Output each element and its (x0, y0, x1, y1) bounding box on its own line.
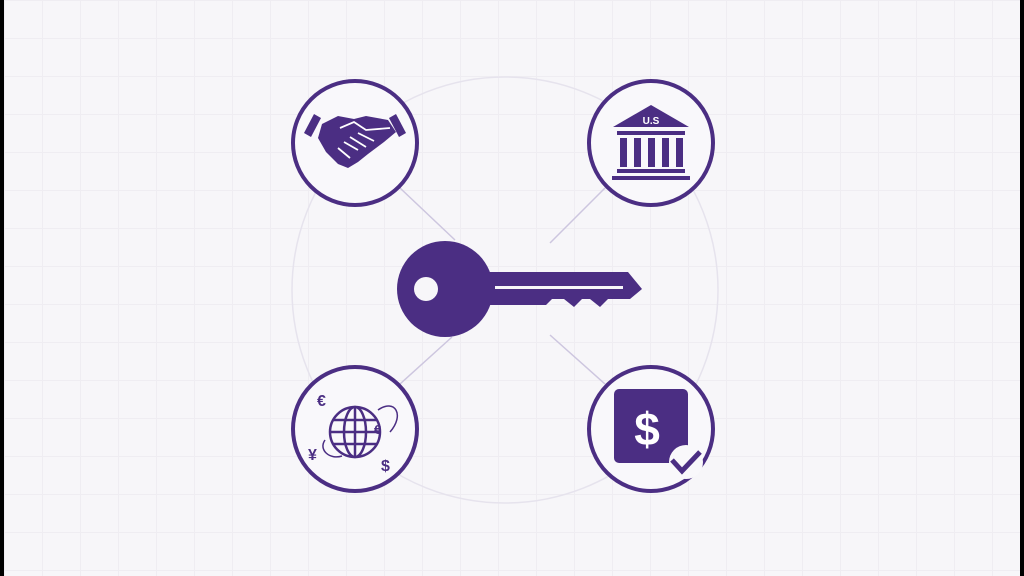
icon: globe currencies: € (317, 393, 326, 410)
icon: US bank: U.S (643, 116, 660, 127)
icon: approved dollar (589, 367, 713, 491)
icon: key (397, 241, 642, 337)
icon: handshake (293, 81, 417, 205)
icon: US bank (589, 81, 713, 205)
icon: globe currencies: $ (381, 458, 390, 475)
connector lines (400, 188, 605, 384)
icon: globe currencies (293, 367, 417, 491)
icon: globe currencies: ¥ (308, 447, 317, 464)
decorative ring (292, 77, 718, 503)
icon: globe currencies: € (374, 422, 381, 437)
icon: approved dollar: $ (634, 403, 660, 455)
